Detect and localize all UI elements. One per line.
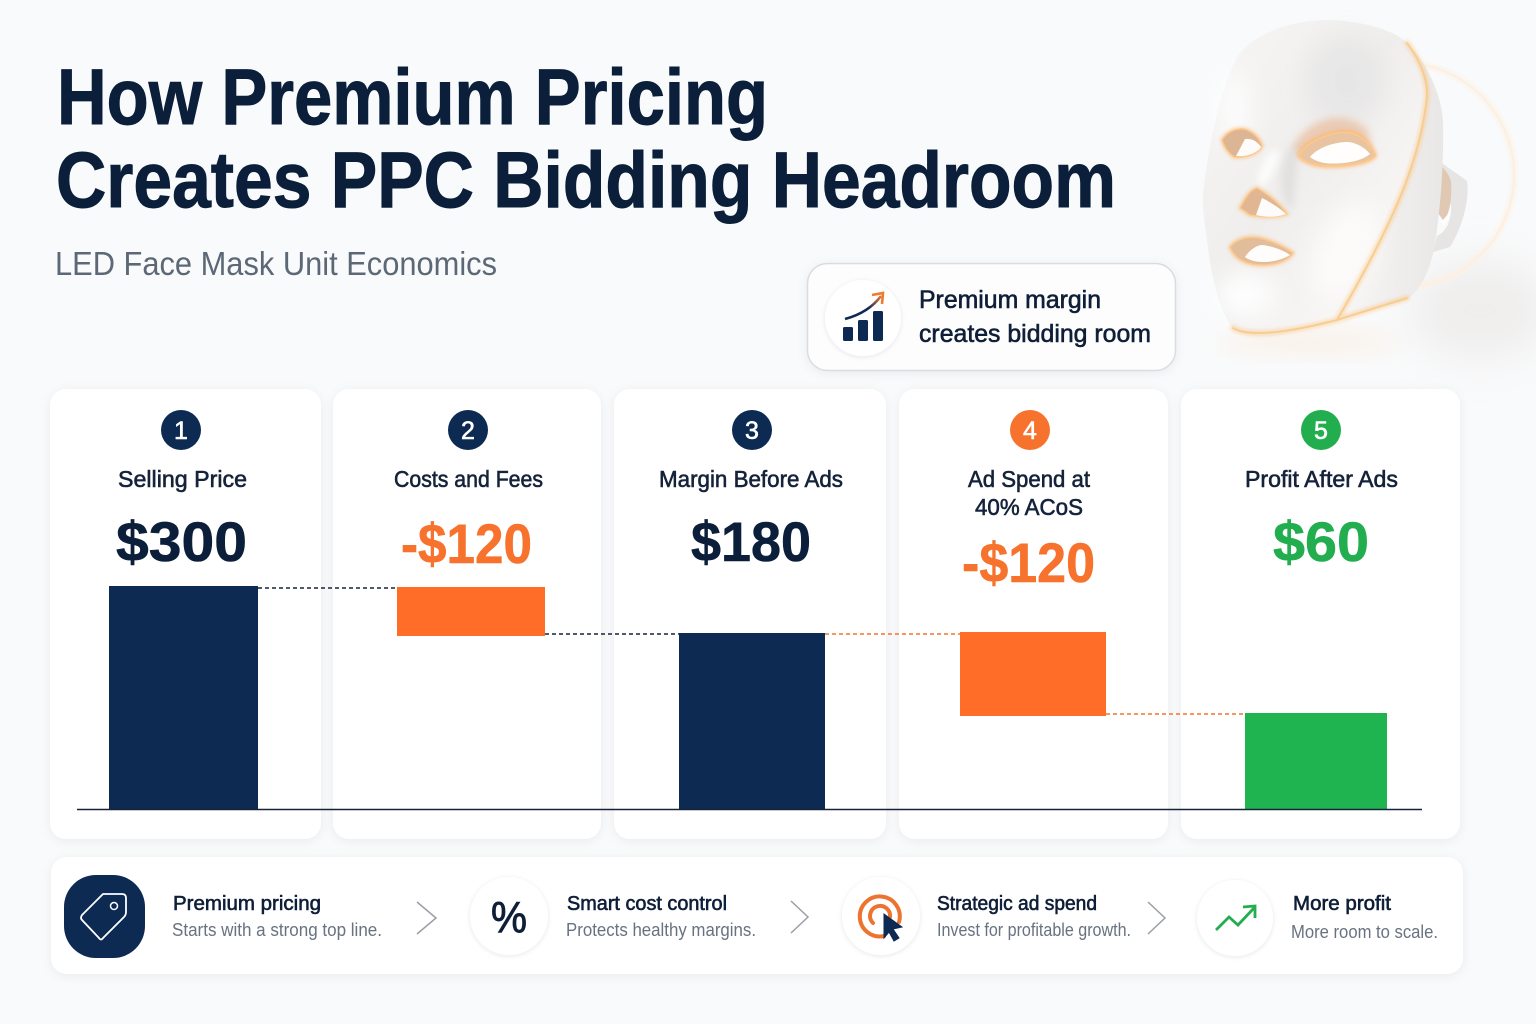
step: premium pricing — [64, 875, 382, 958]
strap — [1430, 156, 1468, 252]
title — [56, 52, 1116, 224]
bar chart — [77, 586, 1422, 810]
step: more profit: More profit — [1293, 893, 1391, 915]
step: premium pricing: Premium pricing — [173, 893, 321, 915]
illustration: LED face mask — [1203, 20, 1536, 360]
card 5: profit after ads — [1181, 389, 1460, 839]
panel: bottom flow strip — [51, 857, 1463, 974]
icon: green trend line — [1197, 880, 1273, 956]
title: How Premium Pricing — [57, 52, 768, 141]
card 1: selling price — [50, 389, 321, 839]
step: smart cost control — [470, 877, 756, 955]
arrow — [791, 901, 808, 933]
card 1: selling price: Selling Price — [118, 466, 247, 492]
card 1: selling price: $300 — [116, 510, 247, 573]
card 3: margin before ads: Margin Before Ads — [659, 466, 843, 492]
card 4: ad spend: 40% ACoS — [975, 494, 1083, 520]
step: strategic ad spend: Strategic ad spend — [937, 893, 1097, 915]
card 5: profit after ads: 5 — [1314, 417, 1328, 445]
card 4: ad spend: 4 — [1023, 417, 1037, 445]
step: smart cost control: Smart cost control — [567, 893, 727, 915]
step: strategic ad spend: Invest for profitable growth. — [937, 920, 1131, 940]
right eye — [1299, 132, 1375, 166]
icon: percent — [470, 877, 548, 955]
card 2: costs and fees: 2 — [461, 417, 475, 445]
icon: target with cursor — [842, 877, 920, 955]
card 4: ad spend — [899, 389, 1168, 839]
arrow — [1148, 902, 1165, 934]
card 5: profit after ads: $60 — [1273, 510, 1369, 573]
mouth — [1230, 237, 1293, 265]
callout text: Premium margin — [919, 286, 1101, 314]
callout: premium margin — [808, 264, 1176, 370]
card 2: costs and fees: -$120 — [401, 512, 532, 575]
card 5: profit after ads: Profit After Ads — [1245, 466, 1398, 492]
card 2: costs and fees — [333, 389, 601, 839]
nose — [1240, 188, 1287, 217]
icon: percent: % — [491, 893, 527, 942]
card 1: selling price: 1 — [174, 417, 188, 445]
face shell — [1203, 20, 1427, 337]
card 3: margin before ads: $180 — [691, 510, 811, 573]
left eye — [1222, 129, 1262, 157]
step: strategic ad spend — [842, 877, 1131, 955]
step: smart cost control: Protects healthy margins. — [566, 920, 756, 940]
callout text: creates bidding room — [919, 320, 1151, 348]
card 4: ad spend: Ad Spend at — [968, 466, 1091, 492]
panel: waterfall chart cards — [50, 389, 1460, 839]
icon: price tag — [64, 875, 145, 958]
step: premium pricing: Starts with a strong top line. — [172, 920, 382, 940]
step: more profit — [1197, 880, 1438, 956]
step: more profit: More room to scale. — [1291, 922, 1438, 942]
card 4: ad spend: -$120 — [962, 531, 1095, 594]
callout text — [919, 286, 1151, 348]
card 3: margin before ads: 3 — [745, 417, 759, 445]
title: Creates PPC Bidding Headroom — [56, 135, 1116, 224]
LED seams — [1233, 43, 1427, 333]
subtitle: LED Face Mask Unit Economics — [55, 245, 497, 282]
icon: growth chart — [825, 280, 901, 356]
side panel — [1337, 43, 1443, 320]
arrow — [417, 902, 436, 934]
card 2: costs and fees: Costs and Fees — [394, 466, 543, 492]
card 3: margin before ads — [614, 389, 886, 839]
